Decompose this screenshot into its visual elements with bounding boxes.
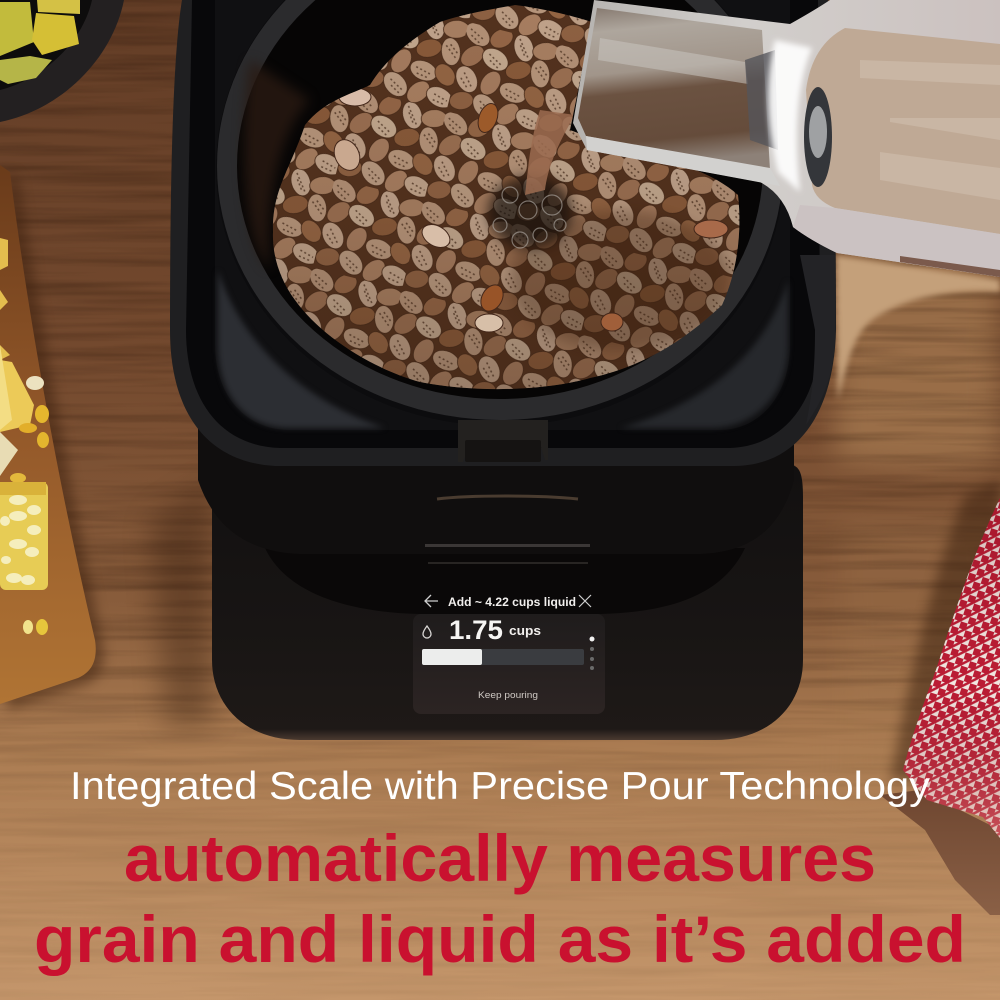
appliance touchscreen: [413, 595, 605, 714]
appliance body below the rim: [198, 420, 794, 614]
screen header: Add ~ 4.22 cups liquid: [448, 597, 576, 609]
embossed brand mark: [425, 544, 590, 564]
bottle body interior: [806, 28, 1000, 234]
bottle spot: [804, 87, 832, 187]
appliance outer housing rim: [170, 0, 836, 466]
page indicator dots: [590, 636, 594, 670]
corn kernels: [0, 238, 49, 635]
red houndstooth towel: [903, 498, 1000, 838]
screen status text: Keep pouring: [478, 690, 538, 701]
pinto beans: [272, 5, 740, 390]
headline: grain and liquid as it’s added: [34, 902, 966, 976]
water bubbles: [488, 110, 575, 248]
cutting board with corn: [0, 165, 104, 710]
headline: automatically measures: [124, 821, 876, 895]
subtitle: Integrated Scale with Precise Pour Technology: [70, 765, 931, 808]
pot latch: [458, 420, 548, 462]
bean shading: [273, 6, 740, 389]
bottle neck refraction: [578, 8, 770, 170]
cooking pot: [216, 0, 784, 426]
foreground beans: [329, 88, 728, 332]
bottle collar: [745, 50, 778, 150]
avocado chunks: [0, 0, 80, 84]
measurement readout: cups: [509, 623, 541, 638]
progress bar: [422, 649, 584, 665]
measurement readout: [423, 615, 541, 645]
headline: [34, 821, 966, 976]
shoulder highlight: [768, 40, 812, 192]
measurement readout: 1.75: [449, 615, 503, 645]
glass bottle pouring water: [573, 0, 1000, 277]
inner tray surface: [215, 0, 790, 430]
shadow on counter: [150, 480, 1000, 915]
scale base of the appliance: [212, 465, 803, 740]
lower bottle edge: [793, 205, 1000, 277]
bowl of avocado chunks: [0, 0, 124, 122]
screen header: [425, 595, 591, 609]
water surface: [510, 210, 730, 350]
front handle recess: [437, 496, 578, 499]
